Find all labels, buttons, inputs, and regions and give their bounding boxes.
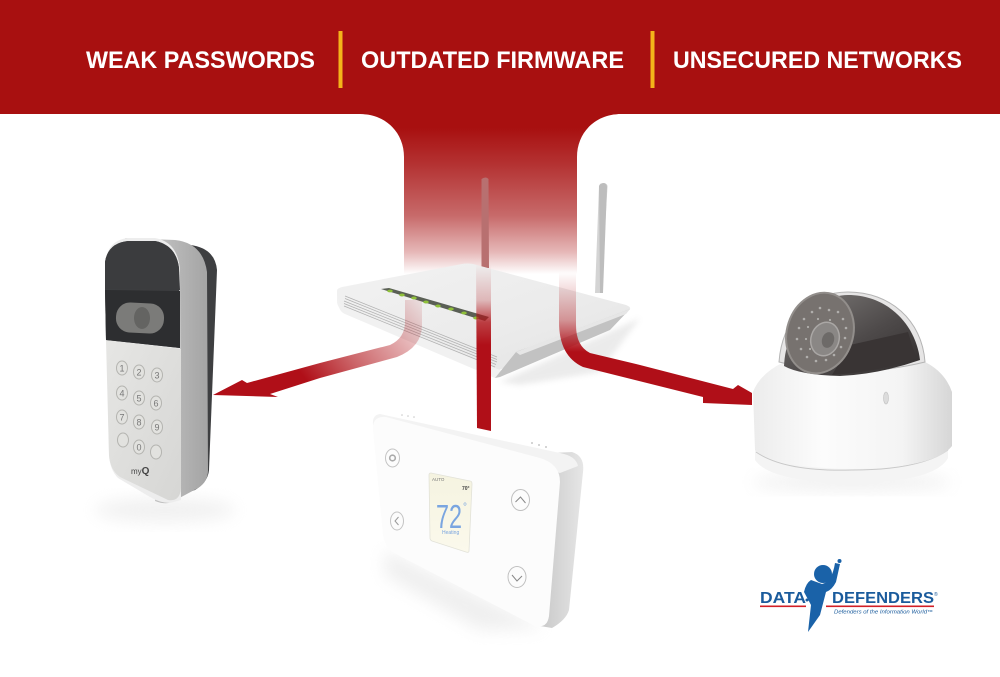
router xyxy=(337,178,640,385)
button: down xyxy=(508,566,526,588)
shadow under camera xyxy=(752,474,952,490)
logo underlines xyxy=(760,606,806,607)
camera lens xyxy=(806,319,844,359)
shadow under doorbell xyxy=(95,498,235,522)
logo figure xyxy=(804,559,842,632)
keypad buttons xyxy=(116,361,162,459)
arrow to thermostat xyxy=(476,264,491,431)
camera panel xyxy=(105,241,180,348)
brand label: myQ xyxy=(131,466,150,477)
keypad digits: 2 xyxy=(136,368,142,378)
thermostat face xyxy=(373,417,560,626)
thermostat screen xyxy=(429,473,472,552)
dark camera housing xyxy=(784,295,920,376)
left antenna xyxy=(482,178,489,268)
shadow under thermostat xyxy=(385,550,545,630)
dome camera xyxy=(753,284,952,483)
doorbell side band xyxy=(125,238,208,503)
keypad digits: 4 xyxy=(119,388,125,398)
thermostat xyxy=(373,414,583,628)
LED strip xyxy=(381,288,489,321)
front vents xyxy=(344,296,497,367)
keypad digits: 1 xyxy=(119,364,125,374)
screen text: AUTO xyxy=(432,477,445,482)
Data Defenders logo: DEFENDERS xyxy=(832,590,934,607)
glass dome xyxy=(779,292,925,371)
keypad digits: 6 xyxy=(153,398,159,408)
heading: unsecured networks: UNSECURED NETWORKS xyxy=(673,47,962,74)
button: settings xyxy=(386,449,400,467)
logo tagline: Defenders of the Information World™ xyxy=(834,610,933,616)
camera body xyxy=(753,362,952,469)
heading: weak passwords: WEAK PASSWORDS xyxy=(86,47,315,74)
sensor dots xyxy=(401,414,547,448)
keypad digits: 3 xyxy=(154,370,160,380)
keypad digits: 8 xyxy=(136,418,142,428)
keypad digits: 9 xyxy=(154,422,160,432)
thermostat top edge xyxy=(373,414,578,473)
button: up xyxy=(512,490,530,510)
camera screw mark xyxy=(884,392,888,404)
arrow to camera xyxy=(559,272,752,405)
infrared LEDs xyxy=(796,307,847,362)
LED ring plate xyxy=(776,284,864,382)
Data Defenders logo xyxy=(760,559,938,632)
camera base ring xyxy=(755,447,948,483)
doorbell keypad device xyxy=(105,238,217,503)
heading: outdated firmware: OUTDATED FIRMWARE xyxy=(361,47,624,74)
thermostat: 70° xyxy=(462,486,470,492)
keypad digits: 5 xyxy=(136,394,142,404)
keypad digits xyxy=(119,364,160,452)
keypad digits: 7 xyxy=(119,412,125,422)
router right flank xyxy=(495,309,630,378)
logo wordmark: DATA xyxy=(760,590,806,607)
right antenna xyxy=(595,183,608,293)
thermostat: ° xyxy=(463,502,467,513)
button: back xyxy=(390,512,404,530)
Data Defenders logo: ® xyxy=(934,591,938,598)
router top xyxy=(337,264,630,372)
camera lens window xyxy=(115,302,165,334)
doorbell white bezel xyxy=(105,238,181,503)
doorbell dark side xyxy=(180,245,217,495)
thermostat: Heating xyxy=(442,530,459,536)
thermostat: 72 xyxy=(436,498,462,535)
router front xyxy=(337,294,505,378)
keypad digits: 0 xyxy=(136,442,142,452)
keypad panel xyxy=(106,340,181,500)
thermostat side xyxy=(540,452,583,628)
divider left xyxy=(338,31,342,88)
red header banner with stem xyxy=(0,0,1000,274)
divider right xyxy=(650,31,654,88)
arrow to doorbell xyxy=(213,300,422,397)
